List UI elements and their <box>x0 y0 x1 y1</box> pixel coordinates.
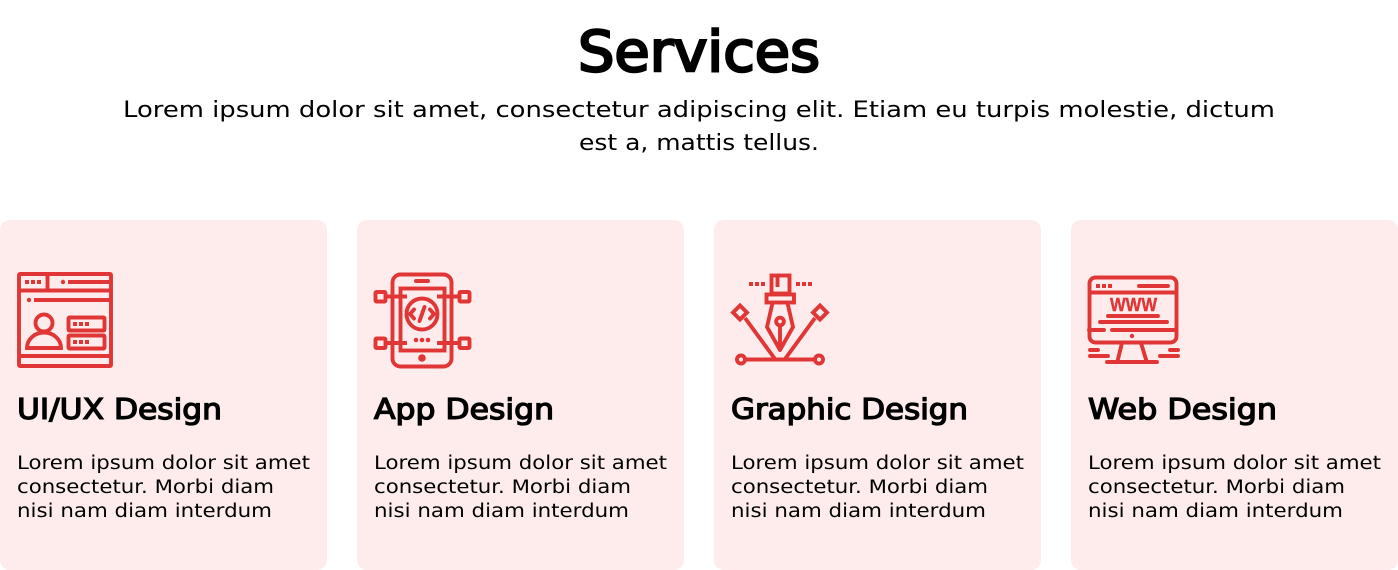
card heading: Graphic Design <box>731 393 968 426</box>
panel: Graphic Design <box>714 220 1041 570</box>
card heading: Web Design <box>1088 393 1277 426</box>
panel: Web Design <box>1071 220 1398 570</box>
card body text: nisi nam diam interdum <box>374 501 629 522</box>
card body text: consectetur. Morbi diam <box>731 477 988 498</box>
card body text: Lorem ipsum dolor sit amet <box>17 453 310 474</box>
card body text: consectetur. Morbi diam <box>374 477 631 498</box>
card body text: Lorem ipsum dolor sit amet <box>1088 453 1381 474</box>
panel: UI/UX Design <box>0 220 327 570</box>
icon: browser window with user profile <box>18 273 112 366</box>
title: Services <box>578 20 820 85</box>
icon: desktop monitor with website <box>1089 278 1178 362</box>
card body text: consectetur. Morbi diam <box>1088 477 1345 498</box>
card body text <box>374 453 667 522</box>
card body text: nisi nam diam interdum <box>731 501 986 522</box>
card body text: Lorem ipsum dolor sit amet <box>731 453 1024 474</box>
card body text: nisi nam diam interdum <box>17 501 272 522</box>
subtitle text <box>123 97 1275 156</box>
card body text: nisi nam diam interdum <box>1088 501 1343 522</box>
card heading: UI/UX Design <box>17 393 222 426</box>
icon: smartphone with code symbol <box>376 274 470 366</box>
subtitle text: est a, mattis tellus. <box>579 130 819 156</box>
panel: App Design <box>357 220 684 570</box>
icon: desktop monitor with website: WWW <box>1110 295 1157 315</box>
icon: pen tool nib with anchor points <box>733 275 827 364</box>
card body text: consectetur. Morbi diam <box>17 477 274 498</box>
subtitle text: Lorem ipsum dolor sit amet, consectetur adipiscing elit. Etiam eu turpis molestie, dictum <box>123 97 1275 123</box>
card heading: App Design <box>374 393 554 426</box>
card body text <box>17 453 310 522</box>
card body text <box>1088 453 1381 522</box>
card body text <box>731 453 1024 522</box>
card body text: Lorem ipsum dolor sit amet <box>374 453 667 474</box>
